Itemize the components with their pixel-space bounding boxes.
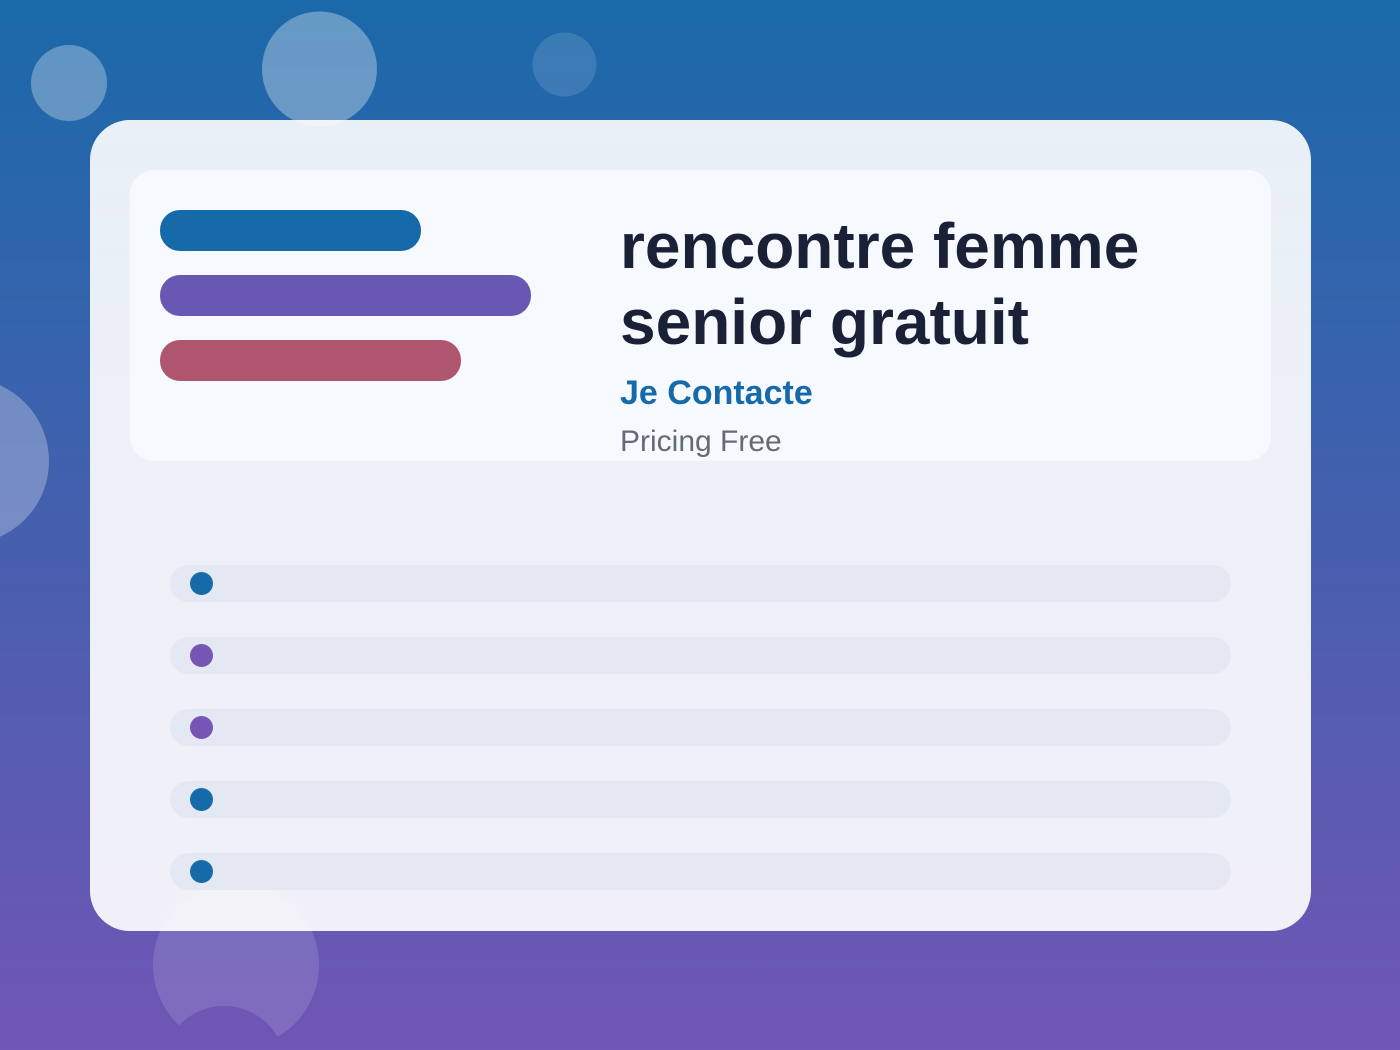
main card [90, 120, 1311, 931]
list row 4 [170, 781, 1231, 818]
list row 5 [170, 853, 1231, 890]
background circles [0, 12, 596, 1036]
pricing text: Pricing Free [620, 425, 782, 458]
header panel [130, 170, 1271, 461]
blue bar [160, 210, 421, 251]
purple bar [160, 275, 531, 316]
title [620, 210, 1139, 358]
subtitle: Je Contacte [620, 374, 813, 412]
rose bar [160, 340, 461, 381]
title: rencontre femme [620, 210, 1139, 282]
list row 1 [170, 565, 1231, 602]
list row 3 [170, 709, 1231, 746]
list row 2 [170, 637, 1231, 674]
title: senior gratuit [620, 286, 1029, 358]
